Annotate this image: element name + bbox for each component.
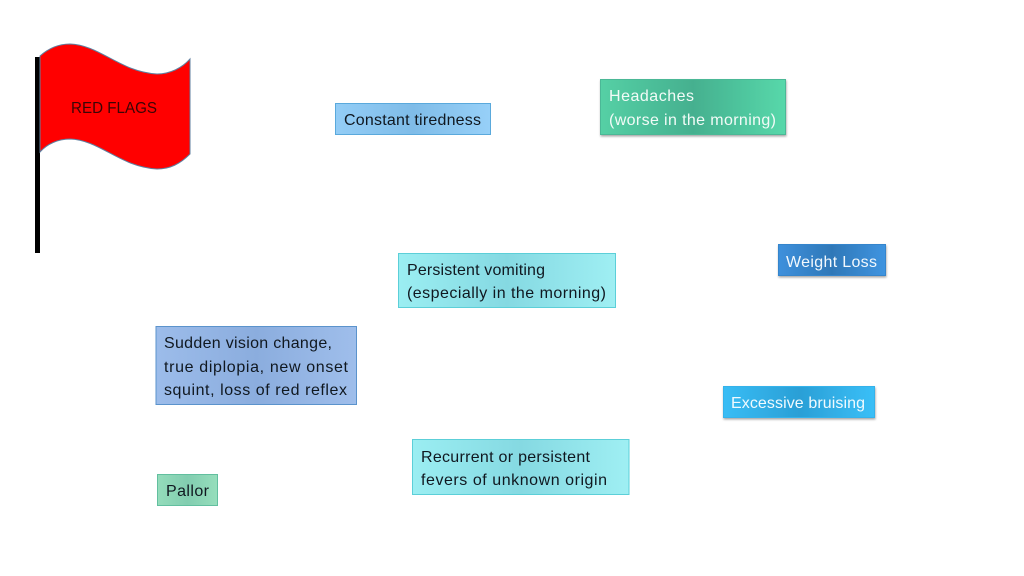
box: constant tiredness: Constant tiredness bbox=[344, 112, 481, 129]
box: pallor bbox=[158, 474, 218, 506]
box: persistent vomiting: Persistent vomiting bbox=[407, 262, 545, 279]
box: recurrent fevers: Recurrent or persistent bbox=[421, 449, 591, 466]
box: headaches: Headaches bbox=[609, 88, 694, 105]
box: persistent vomiting bbox=[398, 254, 616, 308]
box: sudden vision change: squint, loss of red reflex bbox=[164, 382, 347, 399]
box: recurrent fevers: fevers of unknown origin bbox=[421, 472, 607, 489]
box: weight loss: Weight Loss bbox=[786, 254, 877, 271]
box: excessive bruising bbox=[724, 386, 874, 418]
box: headaches bbox=[600, 80, 786, 134]
box: excessive bruising: Excessive bruising bbox=[731, 395, 865, 412]
box: sudden vision change bbox=[156, 326, 356, 404]
box: persistent vomiting: (especially in the morning) bbox=[407, 285, 606, 302]
red flag icon bbox=[35, 44, 190, 253]
box: recurrent fevers bbox=[412, 440, 629, 494]
flag label: RED FLAGS bbox=[71, 100, 157, 117]
flag cloth bbox=[40, 44, 190, 169]
box: headaches: (worse in the morning) bbox=[609, 112, 776, 129]
box: pallor: Pallor bbox=[166, 483, 210, 500]
box: sudden vision change: true diplopia, new onset bbox=[164, 359, 349, 376]
flag pole bbox=[35, 57, 40, 253]
box: sudden vision change: Sudden vision change, bbox=[164, 335, 332, 352]
box: weight loss bbox=[778, 244, 886, 276]
box: constant tiredness bbox=[336, 104, 490, 134]
